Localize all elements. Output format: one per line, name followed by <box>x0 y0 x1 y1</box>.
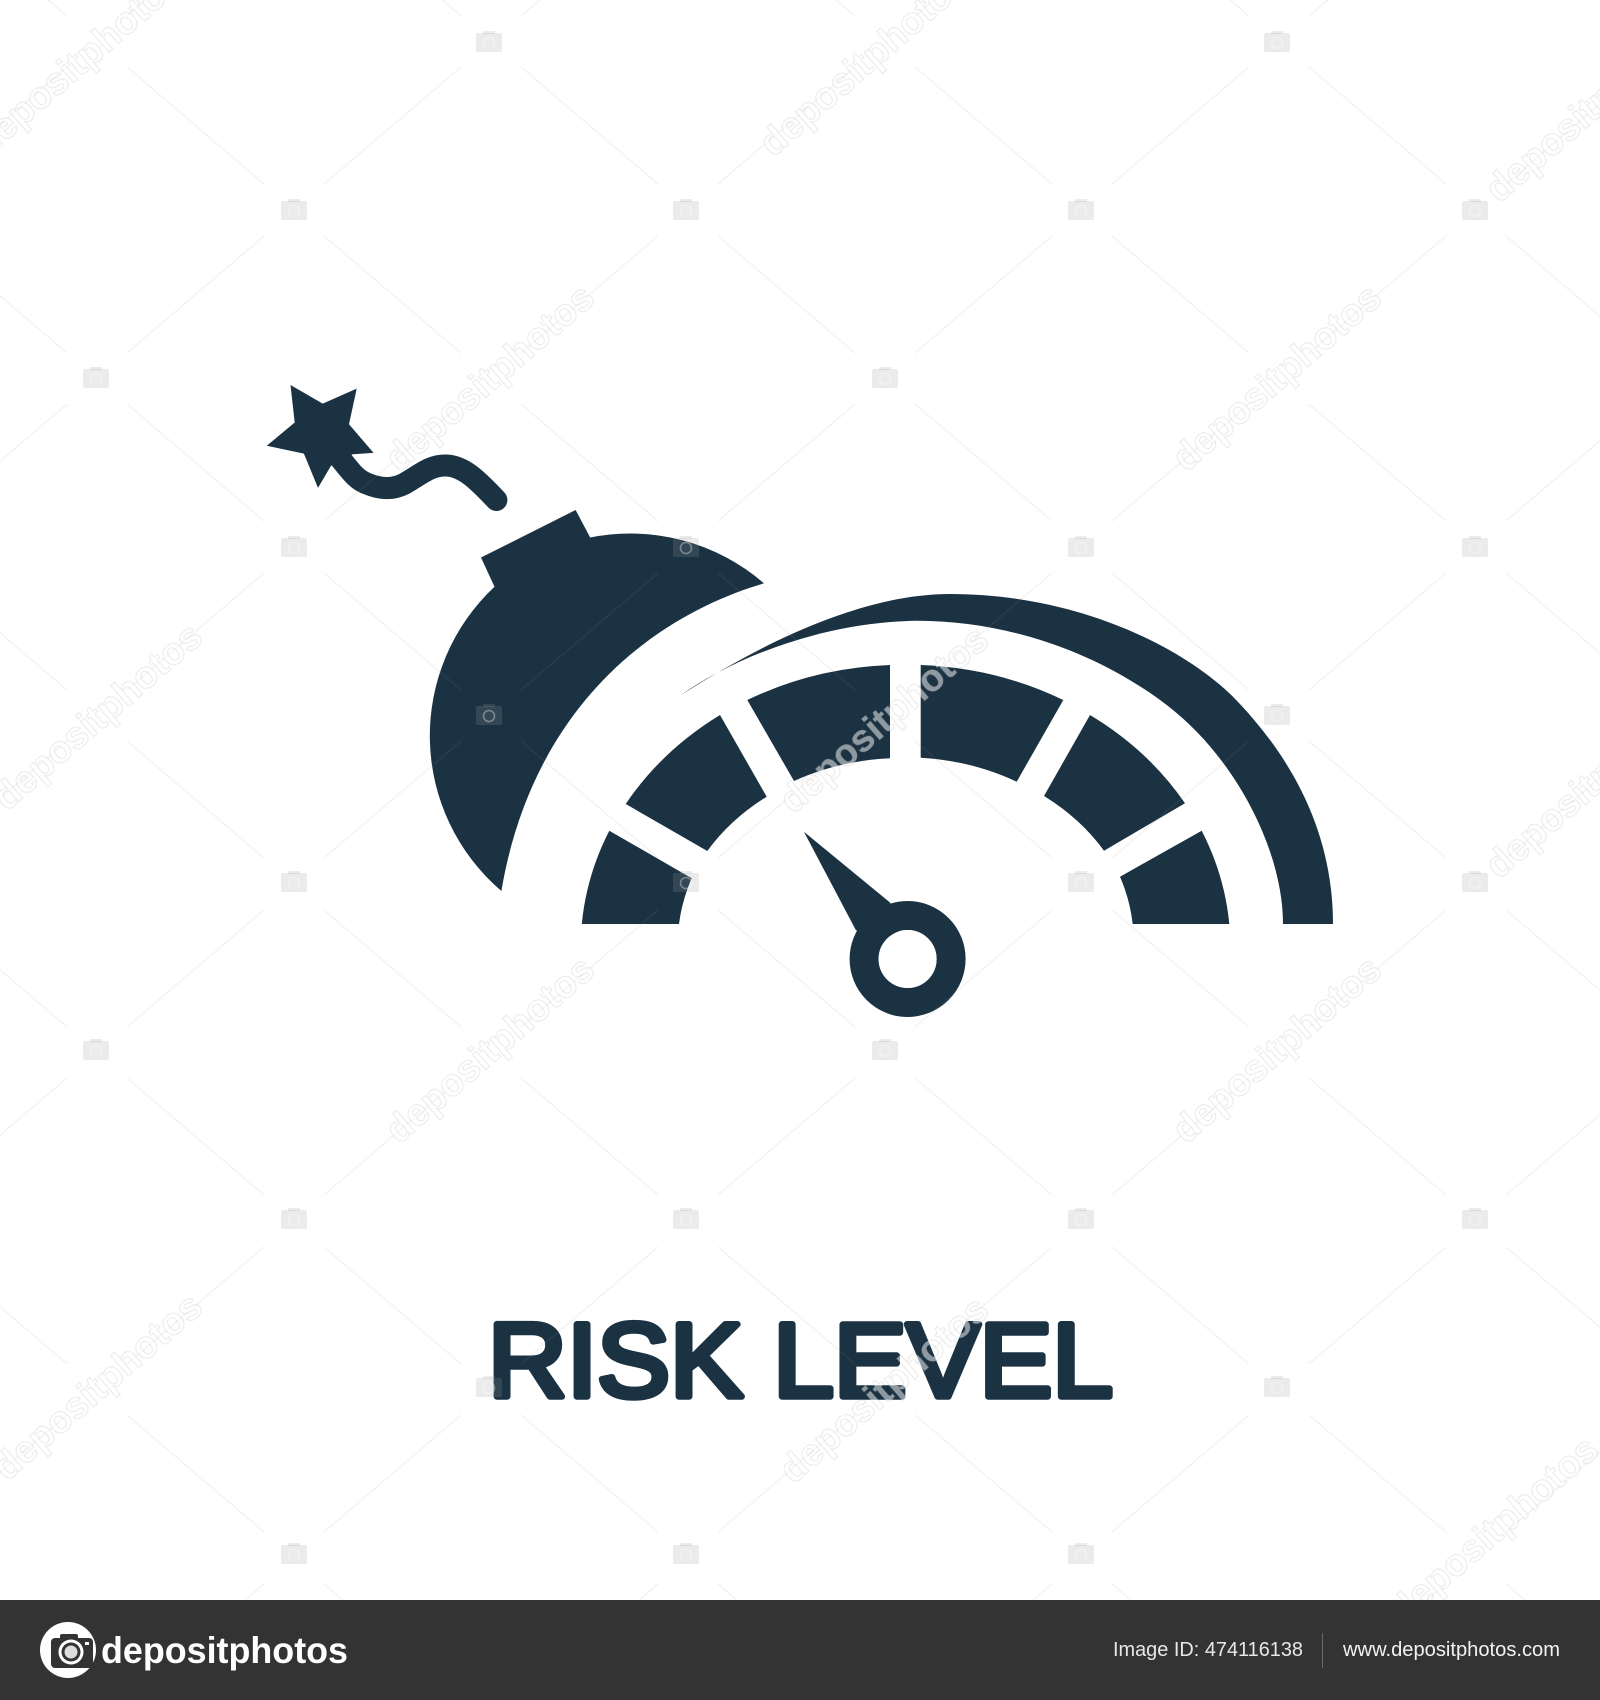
gauge needle <box>804 832 951 1002</box>
watermark overlay: depositphotos <box>772 1288 997 1492</box>
logo wordmark: depositphotos <box>101 1630 348 1671</box>
icon: logo camera badge <box>40 1622 96 1678</box>
icon: spark star <box>267 385 374 488</box>
image id: Image ID: 474116138 <box>1113 1639 1303 1661</box>
icon: fuse <box>341 460 496 500</box>
website url: www.depositphotos.com <box>1342 1638 1560 1661</box>
icon: bomb body <box>430 510 764 891</box>
gauge outer swoosh <box>680 594 1333 924</box>
icon: bomb with spark and fuse <box>267 385 764 891</box>
title: RISK LEVEL <box>488 1302 1113 1420</box>
gauge segments <box>582 665 1229 924</box>
icon: speedometer gauge <box>582 594 1333 1002</box>
watermark overlay: depositphotos <box>378 276 603 480</box>
watermark overlay: depositphotos <box>1165 276 1390 480</box>
watermark overlay: depositphotos <box>1382 1428 1600 1632</box>
watermark overlay: depositphotos <box>772 618 997 822</box>
footer bar <box>0 1600 1600 1700</box>
watermark overlay: depositphotos <box>378 948 603 1152</box>
watermark overlay: depositphotos <box>1165 948 1390 1152</box>
